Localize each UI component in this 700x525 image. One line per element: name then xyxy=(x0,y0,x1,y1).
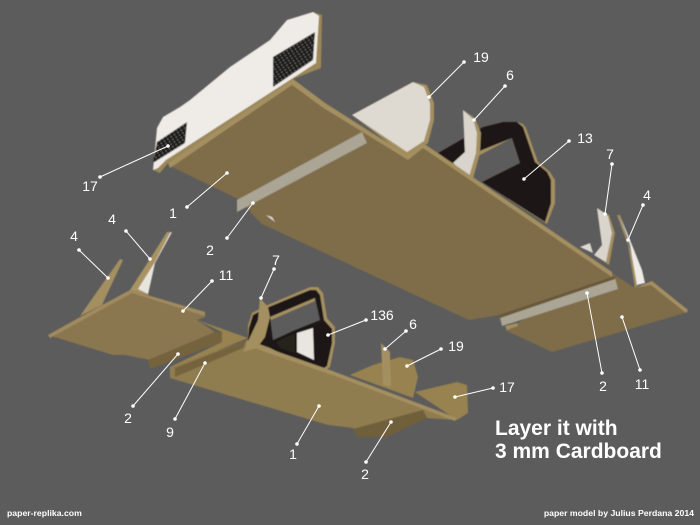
callout: 17 upper: 17 xyxy=(82,178,98,194)
part 4: upper right fin xyxy=(617,215,645,288)
callout: 7 lower: 7 xyxy=(272,252,280,268)
footer: website: paper-replika.com xyxy=(7,508,82,518)
callout: 2 lower right xyxy=(361,420,393,482)
callout: 19 upper: 19 xyxy=(473,49,489,65)
part 4: lower left fin xyxy=(80,259,123,316)
lower model assembly xyxy=(48,232,468,437)
callout: 7 lower xyxy=(259,252,280,300)
callout: 17 upper xyxy=(82,144,170,194)
part 2: right slot strip xyxy=(496,276,618,326)
callout: 2 lower right: 2 xyxy=(361,466,369,482)
part 9: lower strip xyxy=(175,340,247,377)
part 13: black handle piece xyxy=(438,122,555,224)
callout: 11 left xyxy=(181,267,233,313)
callout: 6 lower: 6 xyxy=(409,316,417,332)
part 1: lower plate xyxy=(170,340,457,435)
callout: 136 xyxy=(326,307,394,337)
part 2: lower right strip xyxy=(353,410,427,437)
callout: 7 upper xyxy=(603,146,614,216)
callout: 19 lower xyxy=(405,338,464,368)
callout: 2 lower left xyxy=(124,352,180,426)
part 19: white rear panel xyxy=(352,82,434,157)
part 6: upper upright xyxy=(453,110,481,182)
callout: 136: 136 xyxy=(370,307,394,323)
callout: 11 left: 11 xyxy=(219,267,233,283)
callout: 1 upper: 1 xyxy=(169,205,177,221)
callout: 4 upper right: 4 xyxy=(643,187,651,203)
part 1: main upper plate xyxy=(168,79,615,320)
callout: 1 lower xyxy=(289,404,321,462)
part 2: lower left strip xyxy=(148,332,222,369)
callout: 11 right xyxy=(620,315,649,392)
part 4: lower white fin xyxy=(130,232,172,295)
part 19: lower tan panel xyxy=(350,357,418,398)
part 7: upper right upright xyxy=(580,208,615,265)
callout: 4 left: 4 xyxy=(108,211,116,227)
callout: 17 lower xyxy=(453,379,515,399)
footer: credit: paper model by Julius Perdana 2014 xyxy=(544,508,694,518)
part 11: upper right plate xyxy=(505,272,688,352)
callout: 19 lower: 19 xyxy=(448,338,464,354)
callout: 4 upper right xyxy=(626,187,651,242)
callout: 9: 9 xyxy=(166,424,174,440)
heading: Layer it with 3 mm Cardboard: 3 mm Cardboard xyxy=(495,440,662,463)
callout: 6 upper xyxy=(472,67,514,122)
part 17: lower tan panel xyxy=(415,382,468,420)
part 6: lower upright xyxy=(381,343,391,387)
upper model assembly xyxy=(153,12,688,352)
callout: 2 upper xyxy=(206,201,255,258)
part 2: upper slot strip xyxy=(237,132,369,224)
part 17: white front panel with grilles xyxy=(153,12,322,173)
callout: 6 upper: 6 xyxy=(506,67,514,83)
callout: 11 right: 11 xyxy=(635,376,649,392)
heading: Layer it with 3 mm Cardboard xyxy=(495,417,662,463)
callout: 2 right xyxy=(585,291,607,394)
callout: 2 upper: 2 xyxy=(206,242,214,258)
callout: 13: 13 xyxy=(577,130,593,146)
callout: 13 xyxy=(522,130,593,181)
callout: 2 right: 2 xyxy=(599,378,607,394)
part 11: lower left plate xyxy=(48,290,215,360)
part 7: lower upright xyxy=(243,298,270,352)
callout: 7 upper: 7 xyxy=(606,146,614,162)
callout: 19 upper xyxy=(427,49,489,99)
heading: Layer it with 3 mm Cardboard: Layer it with xyxy=(495,417,618,440)
callout: 4 far left: 4 xyxy=(70,228,78,244)
callout: 17 lower: 17 xyxy=(499,379,515,395)
callout: 2 lower left: 2 xyxy=(124,410,132,426)
callout: 4 far left xyxy=(70,228,110,280)
part 9 base: connecting plate xyxy=(170,320,248,378)
part 136: black handle with white panel xyxy=(248,287,335,375)
callout: 9 xyxy=(166,361,207,440)
callout: 1 upper xyxy=(169,171,229,221)
callout: 4 left xyxy=(108,211,152,261)
callout: 6 lower xyxy=(383,316,417,351)
callout: 1 lower: 1 xyxy=(289,446,297,462)
